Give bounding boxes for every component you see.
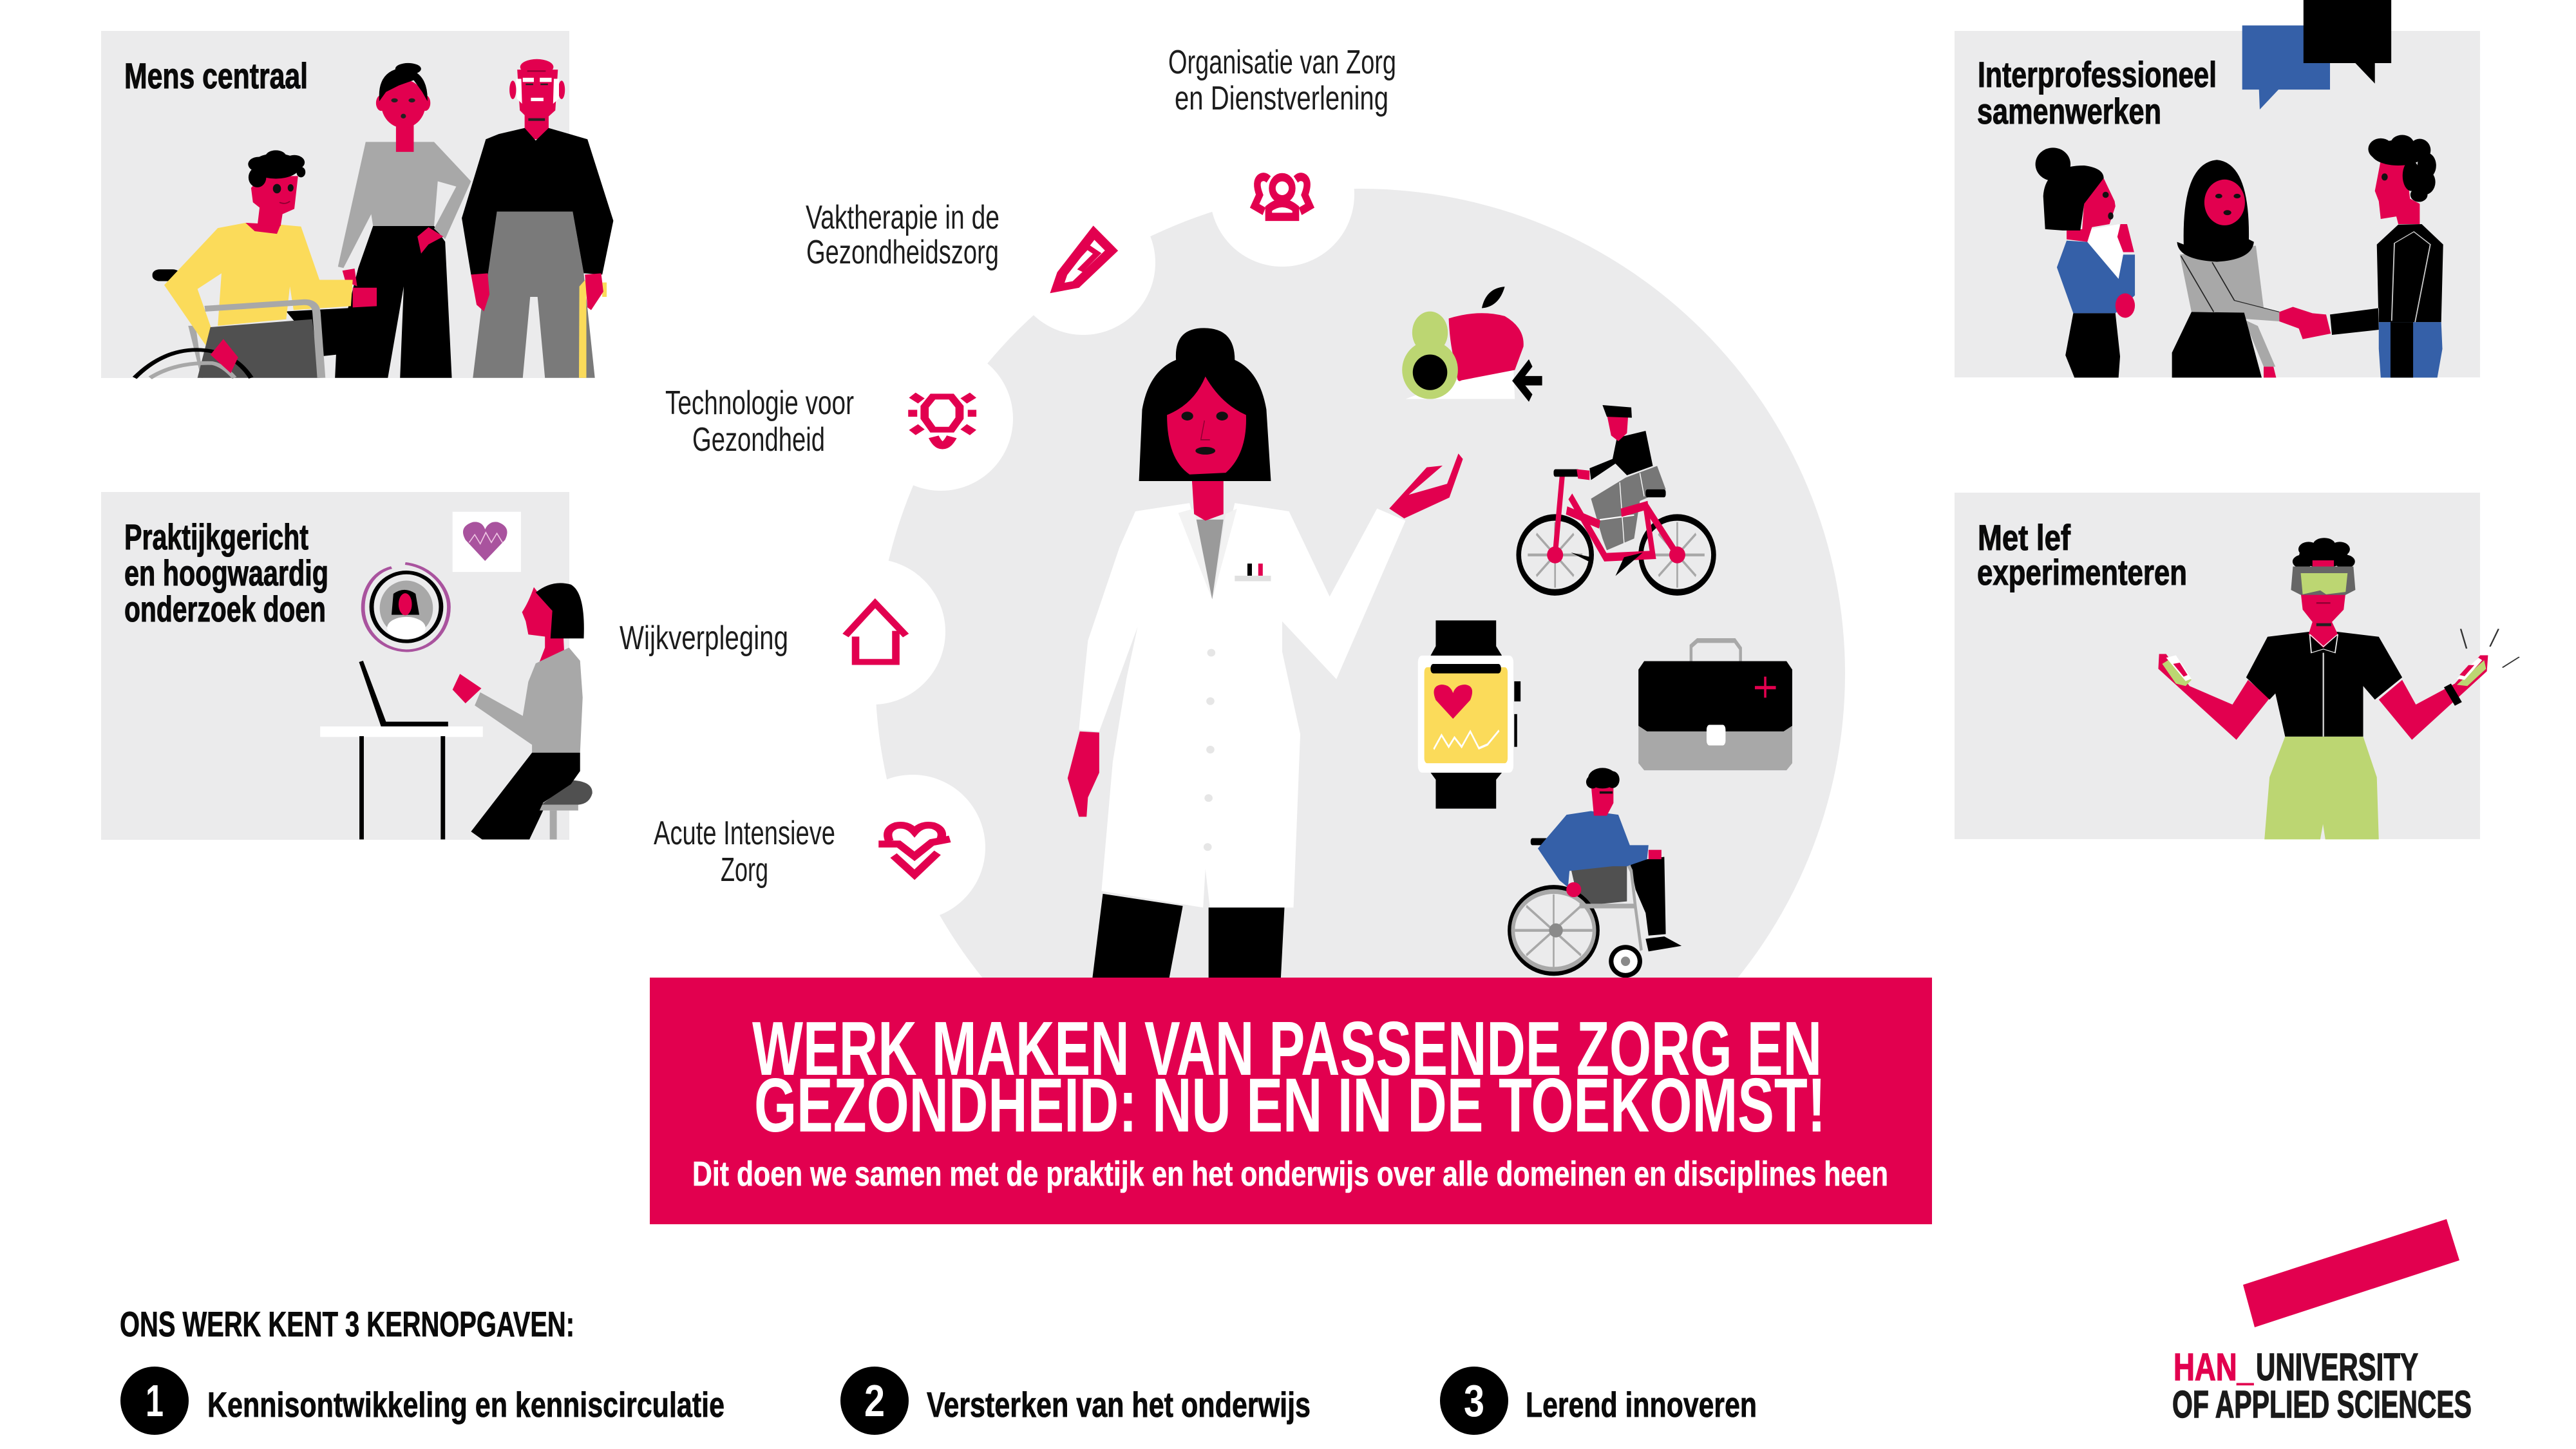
label: wijkverpleging: Wijkverpleging xyxy=(620,620,788,657)
label: vaktherapie in de gezondheidszorg xyxy=(806,199,999,271)
kernopgave 1: Kennisontwikkeling en kenniscirculatie xyxy=(207,1385,724,1425)
panel: interprofessioneel samenwerken xyxy=(1955,0,2480,377)
heading: mens centraal: Mens centraal xyxy=(124,55,308,96)
illustration: doctor in white coat xyxy=(1068,328,1463,978)
illustration: person with VR headset xyxy=(2158,538,2519,839)
icon: three people xyxy=(1255,177,1310,217)
label: organisatie van zorg en dienstverlening: en Dienstverlening xyxy=(1175,80,1388,117)
logo: HAN University of Applied Sciences xyxy=(2172,1219,2472,1426)
heading: ons werk kent 3 kernopgaven: ONS WERK KENT 3 KERNOPGAVEN: xyxy=(120,1304,574,1344)
illustration: three people xyxy=(135,59,613,378)
icon: light bulb xyxy=(908,395,976,446)
illustration: healthy food xyxy=(1402,287,1542,399)
logo: HAN University of Applied Sciences: UNIVERSITY xyxy=(2256,1346,2418,1388)
heading: interprofessioneel samenwerken: samenwerken xyxy=(1977,91,2161,131)
label: technologie voor gezondheid xyxy=(665,384,854,459)
label: organisatie van zorg en dienstverlening: Organisatie van Zorg xyxy=(1168,44,1396,81)
label: organisatie van zorg en dienstverlening xyxy=(1168,44,1396,117)
label: technologie voor gezondheid: Gezondheid xyxy=(692,421,825,459)
label: technologie voor gezondheid: Technologie voor xyxy=(665,384,854,422)
heading: praktijkgericht en hoogwaardig onderzoek doen: Praktijkgericht xyxy=(124,516,308,557)
illustration: speech bubbles and three colleagues xyxy=(2036,0,2443,377)
label: acute intensieve zorg xyxy=(654,815,835,889)
kernopgave 3: Lerend innoveren xyxy=(1526,1385,1757,1425)
kernopgave 3 xyxy=(1440,1367,1757,1435)
banner title: WERK MAKEN VAN PASSENDE ZORG EN xyxy=(752,1006,1822,1092)
panel: mens centraal xyxy=(101,31,613,378)
logo: HAN University of Applied Sciences: HAN_ xyxy=(2174,1346,2254,1388)
heading: praktijkgericht en hoogwaardig onderzoek doen: onderzoek doen xyxy=(124,589,326,629)
illustration: smartwatch xyxy=(1418,620,1520,809)
gray circle with white scallops xyxy=(800,122,1845,1159)
banner: main message xyxy=(650,978,1932,1224)
kernopgave 2: Versterken van het onderwijs xyxy=(927,1385,1311,1425)
illustration: cyclist xyxy=(1516,405,1716,596)
panel: met lef experimenteren xyxy=(1955,493,2519,839)
kernopgave 1: 1 xyxy=(146,1376,164,1426)
banner title: GEZONDHEID: NU EN IN DE TOEKOMST! xyxy=(754,1063,1826,1148)
heading: praktijkgericht en hoogwaardig onderzoek doen: en hoogwaardig xyxy=(124,553,328,593)
heading: met lef experimenteren xyxy=(1977,517,2187,592)
label: vaktherapie in de gezondheidszorg: Gezondheidszorg xyxy=(806,234,999,271)
label: vaktherapie in de gezondheidszorg: Vaktherapie in de xyxy=(806,199,999,236)
illustration: medical kit xyxy=(1638,641,1792,770)
illustration: researcher at laptop xyxy=(320,512,592,839)
illustration: wheelchair user xyxy=(1508,768,1681,978)
icon: house xyxy=(846,603,906,662)
banner subtitle: Dit doen we samen met de praktijk en het onderwijs over alle domeinen en disciplines heen xyxy=(692,1155,1888,1193)
heading: interprofessioneel samenwerken: Interprofessioneel xyxy=(1978,54,2217,95)
label: acute intensieve zorg: Acute Intensieve xyxy=(654,815,835,852)
label: acute intensieve zorg: Zorg xyxy=(721,851,768,889)
heading: interprofessioneel samenwerken xyxy=(1977,54,2217,131)
heading: met lef experimenteren: experimenteren xyxy=(1977,552,2187,592)
kernopgave 3: 3 xyxy=(1464,1376,1484,1426)
heading: praktijkgericht en hoogwaardig onderzoek doen xyxy=(124,516,328,629)
panel: praktijkgericht onderzoek xyxy=(101,492,592,840)
heading: met lef experimenteren: Met lef xyxy=(1978,517,2070,558)
banner title xyxy=(752,1006,1826,1148)
kernopgave 2 xyxy=(840,1367,1311,1435)
kernopgave 1 xyxy=(120,1367,724,1435)
icon: pencil xyxy=(1057,232,1112,288)
icon: heart with pulse xyxy=(878,825,950,875)
kernopgave 2: 2 xyxy=(864,1376,885,1426)
